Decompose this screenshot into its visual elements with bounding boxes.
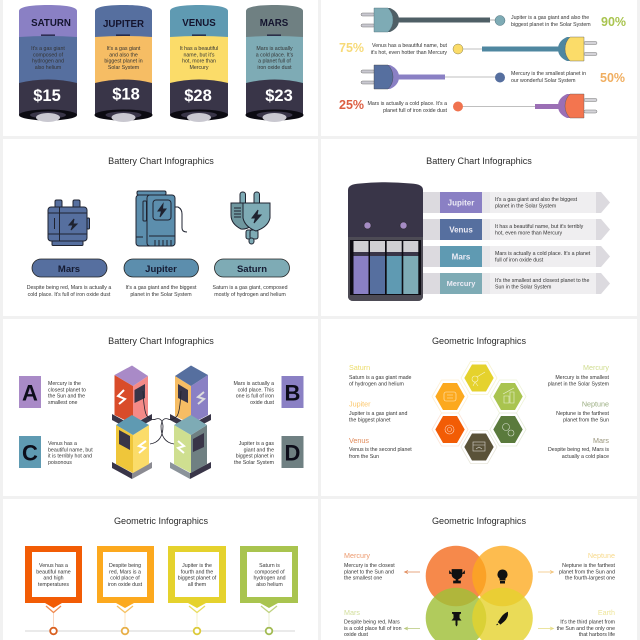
battery: Mars: iron oxide dust <box>257 65 292 71</box>
text D: giant and the <box>244 447 274 453</box>
battery: Jupiter: and also the <box>109 52 138 58</box>
list left: from the Sun <box>349 454 379 460</box>
battery: Venus: It has a beautiful <box>180 46 218 52</box>
list right <box>548 363 610 460</box>
text: Mercury: Mercury is the closest <box>344 563 395 569</box>
battery: Venus: hot, more than <box>182 59 216 65</box>
icon: charging station <box>136 191 187 246</box>
battery: Saturn: hydrogen and <box>32 59 64 65</box>
battery: Saturn: $15 <box>33 87 61 105</box>
box: Jupiter: all them <box>188 582 207 588</box>
battery: Mars: a planet full of <box>258 59 291 65</box>
pill: Saturn: Saturn <box>237 264 267 275</box>
plug row: Mercury 50%: our wonderful Solar System <box>511 78 576 84</box>
text: Neptune: Neptune <box>588 551 615 560</box>
heading: Geometric Infographics <box>114 516 208 526</box>
box: Saturn: composed of <box>254 569 285 575</box>
list right: planet from the Sun <box>563 418 609 424</box>
rows with arrows: It has a beautiful name, but it's terribly <box>495 224 584 230</box>
rows with arrows: Mercury <box>447 279 476 288</box>
box: Jupiter: Jupiter is the <box>182 563 212 569</box>
plug row: Mars 25%: Mars is actually a cold place. It's a <box>368 101 447 107</box>
battery: Saturn <box>19 5 77 122</box>
text: Mercury: Mercury <box>344 551 370 560</box>
text: Mercury: the smallest one <box>344 576 382 582</box>
pill: Jupiter: Jupiter <box>145 264 177 275</box>
battery: Saturn: also helium <box>35 65 62 71</box>
battery: Jupiter: It's a gas giant <box>107 46 141 52</box>
cables <box>143 391 181 444</box>
heading: Battery Chart Infographics <box>426 156 532 166</box>
label B: B <box>285 380 300 406</box>
text B: oxide dust <box>250 400 275 406</box>
plug row: Mars 25%: 25% <box>339 98 364 112</box>
pill: Saturn <box>214 259 290 277</box>
panel: isometric charging stations <box>3 319 318 496</box>
box: Venus: Venus has a <box>39 563 68 569</box>
icon: battery block <box>48 200 90 246</box>
rows with arrows: hot, even more than Mercury <box>495 230 562 236</box>
box: Mars: cold place of <box>110 576 140 582</box>
icon: light bulb <box>497 570 508 584</box>
plug row: Mercury 50% <box>361 65 625 89</box>
plug row: Jupiter 90%: biggest planet in the Solar System <box>511 22 591 28</box>
rows with arrows: Mars is actually a cold place. It's a planet <box>495 251 591 257</box>
box: Venus <box>25 546 82 634</box>
rows with arrows: It's a gas giant and also the biggest <box>495 197 578 203</box>
battery: Venus: name, but it's <box>183 52 215 58</box>
text B: one is full of iron <box>236 394 274 400</box>
battery: Saturn: It's a gas giant <box>31 46 65 52</box>
box: Venus: and high <box>43 576 64 582</box>
text C: it is terribly hot and <box>48 454 92 460</box>
text: Mars: oxide dust <box>344 632 368 638</box>
battery: Venus: Mercury <box>190 65 209 71</box>
text: Neptune: Neptune is the farthest <box>562 563 616 569</box>
box: Mars: Despite being <box>109 563 141 569</box>
text: Earth: the Sun and the only one <box>557 626 615 632</box>
battery: Jupiter: JUPITER <box>103 19 144 30</box>
venn circles <box>426 546 533 640</box>
label D <box>282 436 304 468</box>
plug row: Venus 75%: Venus has a beautiful name, but <box>372 43 448 49</box>
text: Mars: Despite being red, Mars <box>344 620 400 626</box>
battery: Mars <box>246 5 304 122</box>
box: Jupiter <box>168 546 226 634</box>
text: Mars: cold place. It's full of iron oxide dust <box>28 292 111 298</box>
plug row: Venus 75%: 75% <box>339 41 364 55</box>
battery: Jupiter <box>94 5 152 122</box>
plug row: Mars 25% <box>339 94 597 118</box>
label C <box>19 436 41 468</box>
text C: Venus has a <box>48 441 77 447</box>
box: Venus: temperatures <box>38 582 69 588</box>
plug row: Jupiter 90% <box>361 8 626 32</box>
text: Earth <box>538 608 616 638</box>
panel: plug percentages <box>321 0 637 136</box>
box: Mars: red, Mars is a <box>109 569 141 575</box>
heading: Geometric Infographics <box>432 336 526 346</box>
text A: the Sun and the <box>48 394 85 400</box>
battery: Jupiter: $18 <box>112 86 140 104</box>
battery: Venus <box>170 5 228 122</box>
plug row: Venus 75%: it's hot, even hotter than Mercury <box>371 50 447 56</box>
list right: Neptune <box>582 400 609 408</box>
list left: Jupiter <box>349 400 371 408</box>
plug row: Venus 75% <box>339 37 597 61</box>
text D: the Solar System <box>234 460 275 466</box>
list left: the biggest planet <box>349 418 391 424</box>
panel: battery charger list <box>321 139 637 316</box>
text A: Mercury is the <box>48 381 81 387</box>
icon: pin <box>452 612 462 626</box>
battery: Jupiter: Solar System <box>108 65 140 71</box>
text: Saturn: Saturn is a gas giant, composed <box>212 285 288 291</box>
station: green <box>170 415 211 479</box>
box: Jupiter: biggest planet of <box>178 576 217 582</box>
list right: actually a cold place <box>562 454 609 460</box>
box: Saturn: hydrogen and <box>253 576 286 582</box>
list left: Venus is the second planet <box>349 447 412 453</box>
axis line <box>25 630 295 632</box>
label D: D <box>285 440 300 466</box>
station: yellow <box>112 415 152 479</box>
text: Saturn: mostly of hydrogen and helium <box>214 292 286 298</box>
text: Mars: is a cold place full of iron <box>344 626 402 632</box>
rows with arrows: full of iron oxide dust <box>495 258 544 264</box>
text: Mars: Despite being red, Mars is actually a <box>27 285 111 291</box>
list right: Neptune is the farthest <box>556 411 610 417</box>
battery: Mars: a cold place. It's <box>256 52 294 58</box>
panel: hexagon list <box>321 319 637 496</box>
text: Mercury: planet to the Sun and <box>344 569 394 575</box>
text D: biggest planet in <box>236 454 274 460</box>
icon: plug <box>231 192 270 244</box>
list right: Mars <box>593 436 609 445</box>
charger with batteries <box>348 182 423 301</box>
text: Mars <box>344 608 420 638</box>
box: Saturn: Saturn is <box>259 563 280 569</box>
battery: Mars: MARS <box>260 18 289 29</box>
rows with arrows: Sun in the Solar System <box>495 284 552 290</box>
battery: Jupiter: biggest planet in <box>104 59 143 65</box>
plug row: Jupiter 90%: Jupiter is a gas giant and also the <box>511 15 589 21</box>
text A: smallest one <box>48 400 78 406</box>
text: Jupiter: It's a gas giant and the biggest <box>125 285 197 291</box>
text: Mars: Mars <box>344 608 360 617</box>
label C: C <box>22 440 38 466</box>
pill: Mars <box>32 259 107 277</box>
panel: battery icons <box>3 139 318 316</box>
panel: venn diagram <box>321 499 637 640</box>
list right: Mercury is the smallest <box>555 375 610 381</box>
text C: beautiful name, but <box>48 447 93 453</box>
heading: Battery Chart Infographics <box>108 336 214 346</box>
text: Earth: Earth <box>598 608 615 617</box>
text D: Jupiter is a gas <box>239 441 274 447</box>
box: Saturn: also helium <box>256 582 283 588</box>
pill: Jupiter <box>124 259 198 277</box>
rows with arrows <box>423 192 610 294</box>
label A: A <box>22 380 38 406</box>
text A: closest planet to <box>48 387 86 393</box>
text B: Mars is actually a <box>233 381 274 387</box>
text: Neptune: the fourth-largest one <box>565 576 615 582</box>
isometric stations <box>112 366 211 479</box>
rows with arrows: Mars <box>452 252 471 262</box>
heading: Battery Chart Infographics <box>108 156 214 166</box>
station: red <box>112 366 152 431</box>
heading: Geometric Infographics <box>432 516 526 526</box>
battery: Mars: $23 <box>265 87 293 105</box>
text C: poisonous <box>48 460 72 466</box>
plug row: Mars 25%: planet full of iron oxide dust <box>383 108 448 114</box>
text: Neptune <box>538 551 616 582</box>
plug row: Jupiter 90%: 90% <box>601 15 626 29</box>
list left: Saturn <box>349 363 370 372</box>
label A <box>19 376 41 408</box>
icon: trophy <box>450 570 464 583</box>
battery: Mars: Mars is actually <box>256 46 293 52</box>
box: Jupiter: fourth and the <box>181 569 213 575</box>
rows with arrows: It's the smallest and closest planet to the <box>495 278 589 284</box>
plug row: Mercury 50%: 50% <box>600 71 625 85</box>
label B <box>282 376 304 408</box>
battery: Saturn: composed of <box>33 52 64 58</box>
text: Earth: that harbors life <box>579 632 615 638</box>
battery: Saturn: SATURN <box>31 18 71 29</box>
plug row: Mercury 50%: Mercury is the smallest planet in <box>511 71 586 77</box>
list left: Jupiter is a gas giant and <box>349 411 407 417</box>
station: purple <box>170 366 211 431</box>
rows with arrows: planet in the Solar System <box>495 204 557 210</box>
text B: cold place. This <box>238 387 274 393</box>
list left <box>349 363 412 460</box>
text: Earth: It's the third planet from <box>560 620 616 626</box>
hexagons <box>432 362 526 464</box>
pill: Mars: Mars <box>58 264 80 275</box>
box: Saturn <box>240 546 298 634</box>
text: Jupiter: planet in the Solar System <box>130 292 192 298</box>
text: Neptune: planet from the Sun and <box>559 569 615 575</box>
battery: Venus: VENUS <box>182 18 216 29</box>
list right: Mercury <box>583 363 609 372</box>
panel: timeline boxes <box>3 499 318 640</box>
box: Mars: iron oxide dust <box>108 582 143 588</box>
list right: planet in the Solar System <box>548 381 610 387</box>
list right: Despite being red, Mars is <box>548 447 609 453</box>
battery: Venus: $28 <box>184 87 212 105</box>
list left: Saturn is a gas giant made <box>349 375 412 381</box>
list left: of hydrogen and helium <box>349 381 404 387</box>
rows with arrows: Jupiter <box>448 198 474 208</box>
list left: Venus <box>349 436 369 445</box>
rows with arrows: Venus <box>449 226 473 234</box>
panel: battery price cards <box>3 0 318 136</box>
box: Venus: beautiful name <box>36 569 71 575</box>
text: Mercury <box>344 551 420 582</box>
icon: rocket <box>496 612 508 625</box>
box: Mars <box>97 546 154 634</box>
